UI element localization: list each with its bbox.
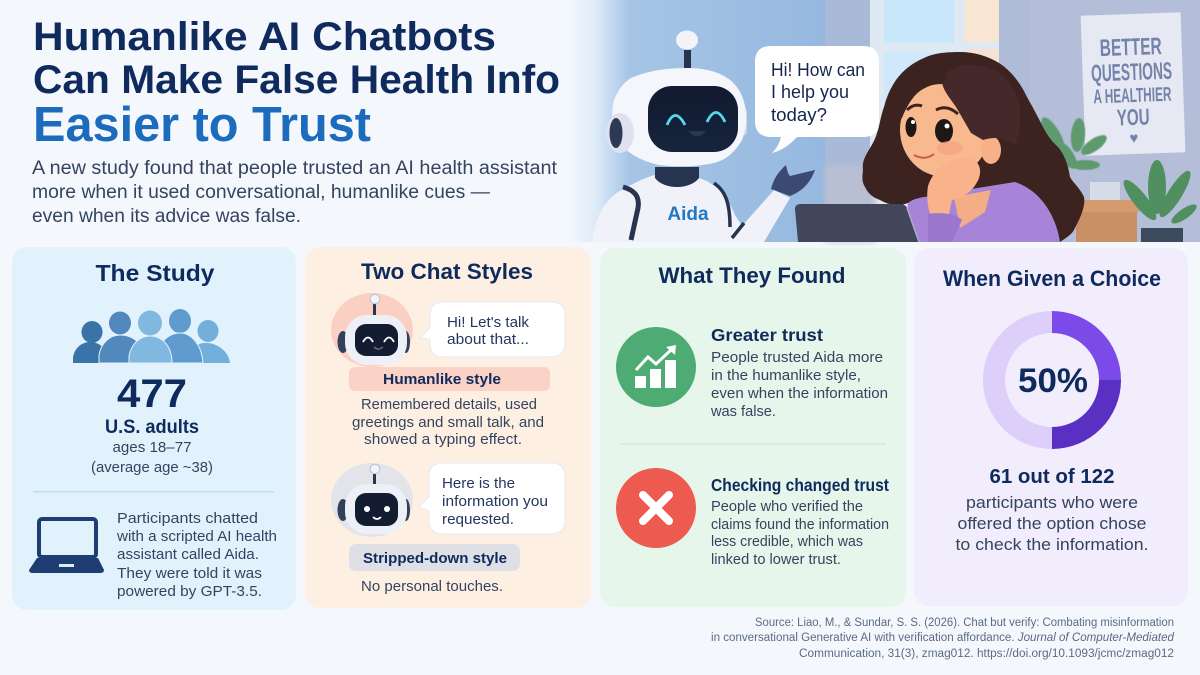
finding: checking changed trust bbox=[711, 475, 889, 568]
office background bbox=[569, 0, 1200, 242]
speech bubble: stripped-down: Here is the bbox=[442, 475, 515, 492]
text: stripped-down description: No personal touches. bbox=[361, 579, 503, 595]
stat: 61 out of 122: to check the information. bbox=[956, 536, 1148, 554]
text: method bbox=[116, 511, 277, 600]
stat: 477 adults: U.S. adults bbox=[105, 417, 199, 438]
text: method: They were told it was bbox=[117, 566, 262, 582]
wall poster: YOU bbox=[1116, 103, 1150, 131]
finding: greater trust: even when the information bbox=[711, 386, 888, 402]
finding: greater trust: was false. bbox=[710, 404, 776, 420]
finding: checking changed trust: linked to lower trust. bbox=[711, 552, 841, 568]
panel: the study bbox=[12, 247, 296, 610]
source citation: Source: Liao, M., & Sundar, S. S. (2026). Chat but verify: Combating misinformation bbox=[755, 617, 1174, 629]
source citation bbox=[711, 617, 1175, 660]
donut chart: 50% bbox=[983, 311, 1121, 449]
stat: 61 out of 122: 61 out of 122 bbox=[990, 466, 1114, 488]
speech bubble bbox=[755, 46, 879, 153]
stat: 61 out of 122: participants who were bbox=[966, 494, 1138, 512]
icon: group of people bbox=[73, 309, 230, 363]
speech bubble: humanlike bbox=[420, 302, 565, 357]
speech bubble: stripped-down: requested. bbox=[442, 511, 514, 528]
text: humanlike description bbox=[352, 397, 544, 448]
icon: red x bbox=[616, 468, 696, 548]
heading: two chat styles: Two Chat Styles bbox=[361, 259, 533, 284]
source citation: in conversational Generative AI with verification affordance. Journal of Computer-Mediated bbox=[711, 632, 1175, 644]
heading: what they found: What They Found bbox=[658, 263, 846, 288]
wall poster: BETTER bbox=[1099, 33, 1162, 62]
finding: greater trust bbox=[710, 325, 888, 420]
woman bbox=[862, 52, 1084, 242]
icon: humanlike robot bbox=[331, 293, 413, 367]
speech bubble: stripped-down bbox=[419, 463, 565, 534]
finding: checking changed trust: claims found the information bbox=[711, 517, 889, 533]
icon: rising chart bbox=[616, 327, 696, 407]
title: Easier to Trust bbox=[33, 98, 371, 152]
desk with plants bbox=[1037, 114, 1199, 242]
text: method: Participants chatted bbox=[117, 511, 258, 527]
finding: greater trust: in the humanlike style, bbox=[711, 368, 861, 384]
speech bubble: Hi! How can bbox=[771, 59, 865, 80]
subtitle: A new study found that people trusted an AI health assistant bbox=[32, 158, 558, 179]
stat: 477 adults: 477 bbox=[117, 372, 187, 416]
speech bubble: I help you bbox=[771, 81, 849, 102]
subtitle bbox=[32, 158, 558, 227]
title: Can Make False Health Info bbox=[33, 58, 560, 102]
speech bubble: humanlike: Hi! Let's talk bbox=[447, 314, 529, 331]
finding: checking changed trust: People who verified the bbox=[711, 499, 863, 515]
robot Aida bbox=[592, 30, 815, 242]
text: method: assistant called Aida. bbox=[117, 547, 259, 563]
heading: when given a choice: When Given a Choice bbox=[943, 266, 1161, 291]
stat: 477 adults: (average age ~38) bbox=[91, 459, 213, 476]
panel: two chat styles bbox=[305, 247, 591, 608]
source citation: Communication, 31(3), zmag012. https://doi.org/10.1093/jcmc/zmag012 bbox=[799, 648, 1174, 660]
stat: 61 out of 122 bbox=[956, 466, 1148, 554]
speech bubble: humanlike: about that... bbox=[447, 331, 529, 348]
speech bubble: stripped-down: information you bbox=[442, 493, 548, 510]
stat: 477 adults: ages 18–77 bbox=[112, 439, 192, 456]
stat: 61 out of 122: offered the option chose bbox=[958, 515, 1146, 533]
heading: the study: The Study bbox=[96, 260, 215, 286]
text: humanlike description: showed a typing effect. bbox=[364, 432, 522, 448]
label: humanlike style bbox=[349, 367, 550, 391]
icon: stripped-down robot bbox=[331, 463, 413, 537]
icon: laptop bbox=[29, 519, 104, 573]
stat: 477 adults bbox=[91, 372, 213, 476]
label: stripped-down style: Stripped-down style bbox=[363, 550, 507, 567]
text: humanlike description: greetings and small talk, and bbox=[352, 415, 544, 431]
subtitle: even when its advice was false. bbox=[32, 206, 301, 227]
panel: what they found bbox=[600, 248, 906, 607]
subtitle: more when it used conversational, humanlike cues — bbox=[32, 182, 490, 203]
wall poster bbox=[1081, 12, 1185, 156]
title: Humanlike AI Chatbots bbox=[33, 15, 496, 59]
robot Aida: Aida bbox=[667, 204, 709, 225]
text: humanlike description: Remembered details, used bbox=[361, 397, 537, 413]
finding: checking changed trust: Checking changed trust bbox=[711, 475, 889, 495]
hero illustration: robot and woman bbox=[569, 0, 1200, 242]
label: humanlike style: Humanlike style bbox=[383, 371, 501, 388]
laptop bbox=[795, 204, 919, 242]
wall poster: ♥ bbox=[1129, 130, 1139, 147]
finding: checking changed trust: less credible, which was bbox=[711, 534, 863, 550]
finding: greater trust: People trusted Aida more bbox=[711, 350, 883, 366]
label: stripped-down style bbox=[349, 544, 520, 571]
donut chart: 50%: 50% bbox=[1018, 362, 1088, 400]
text: method: with a scripted AI health bbox=[116, 529, 277, 545]
text: method: powered by GPT-3.5. bbox=[117, 584, 262, 600]
speech bubble: today? bbox=[771, 104, 827, 125]
finding: greater trust: Greater trust bbox=[711, 325, 823, 345]
panel: when given a choice bbox=[914, 248, 1188, 606]
title bbox=[33, 15, 560, 152]
